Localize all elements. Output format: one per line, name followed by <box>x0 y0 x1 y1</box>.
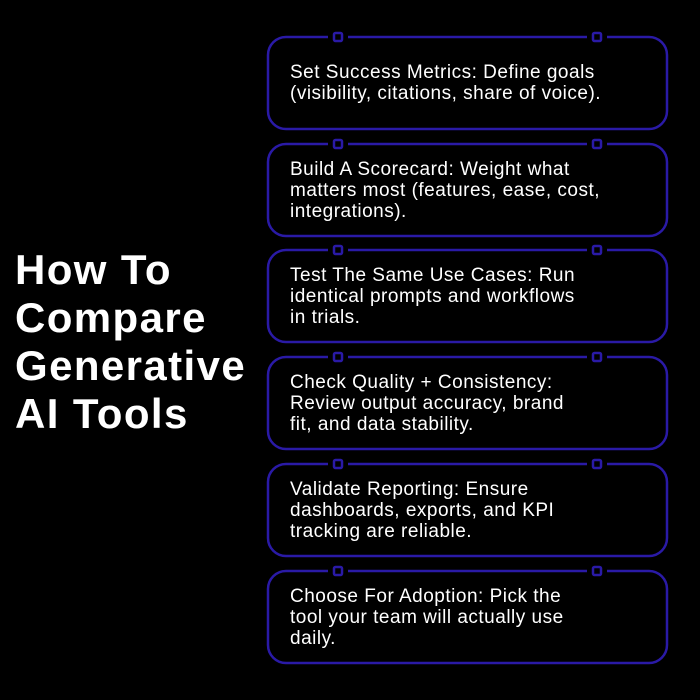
card 1 <box>266 32 668 130</box>
title: Compare <box>15 294 207 341</box>
title <box>15 246 246 437</box>
text 1 <box>290 62 601 104</box>
text 3: in trials. <box>290 306 360 328</box>
card 2 <box>266 138 668 238</box>
text 6: Choose For Adoption: Pick the <box>290 586 561 606</box>
text 4: Check Quality + Consistency: <box>290 372 553 392</box>
text 6: tool your team will actually use <box>290 606 564 628</box>
card 4 <box>266 352 668 450</box>
text 6 <box>290 586 564 648</box>
text 3 <box>290 264 575 328</box>
text 3: Test The Same Use Cases: Run <box>290 264 575 286</box>
title: How To <box>15 246 172 293</box>
card 3 <box>266 244 668 344</box>
text 4 <box>290 372 564 434</box>
text 5: dashboards, exports, and KPI <box>290 500 554 520</box>
title: AI Tools <box>15 390 189 437</box>
text 2: Build A Scorecard: Weight what <box>290 158 570 180</box>
text 5: Validate Reporting: Ensure <box>290 478 529 500</box>
text 6: daily. <box>290 628 336 648</box>
title: Generative <box>15 342 246 389</box>
text 4: fit, and data stability. <box>290 414 474 434</box>
text 3: identical prompts and workflows <box>290 286 575 306</box>
text 2 <box>290 158 600 222</box>
text 1: Set Success Metrics: Define goals <box>290 62 595 83</box>
card 6 <box>266 566 668 664</box>
text 2: integrations). <box>290 200 407 222</box>
card 5 <box>266 458 668 558</box>
text 5: tracking are reliable. <box>290 520 472 542</box>
text 2: matters most (features, ease, cost, <box>290 180 600 200</box>
text 5 <box>290 478 554 542</box>
text 1: (visibility, citations, share of voice). <box>290 83 601 104</box>
text 4: Review output accuracy, brand <box>290 392 564 414</box>
